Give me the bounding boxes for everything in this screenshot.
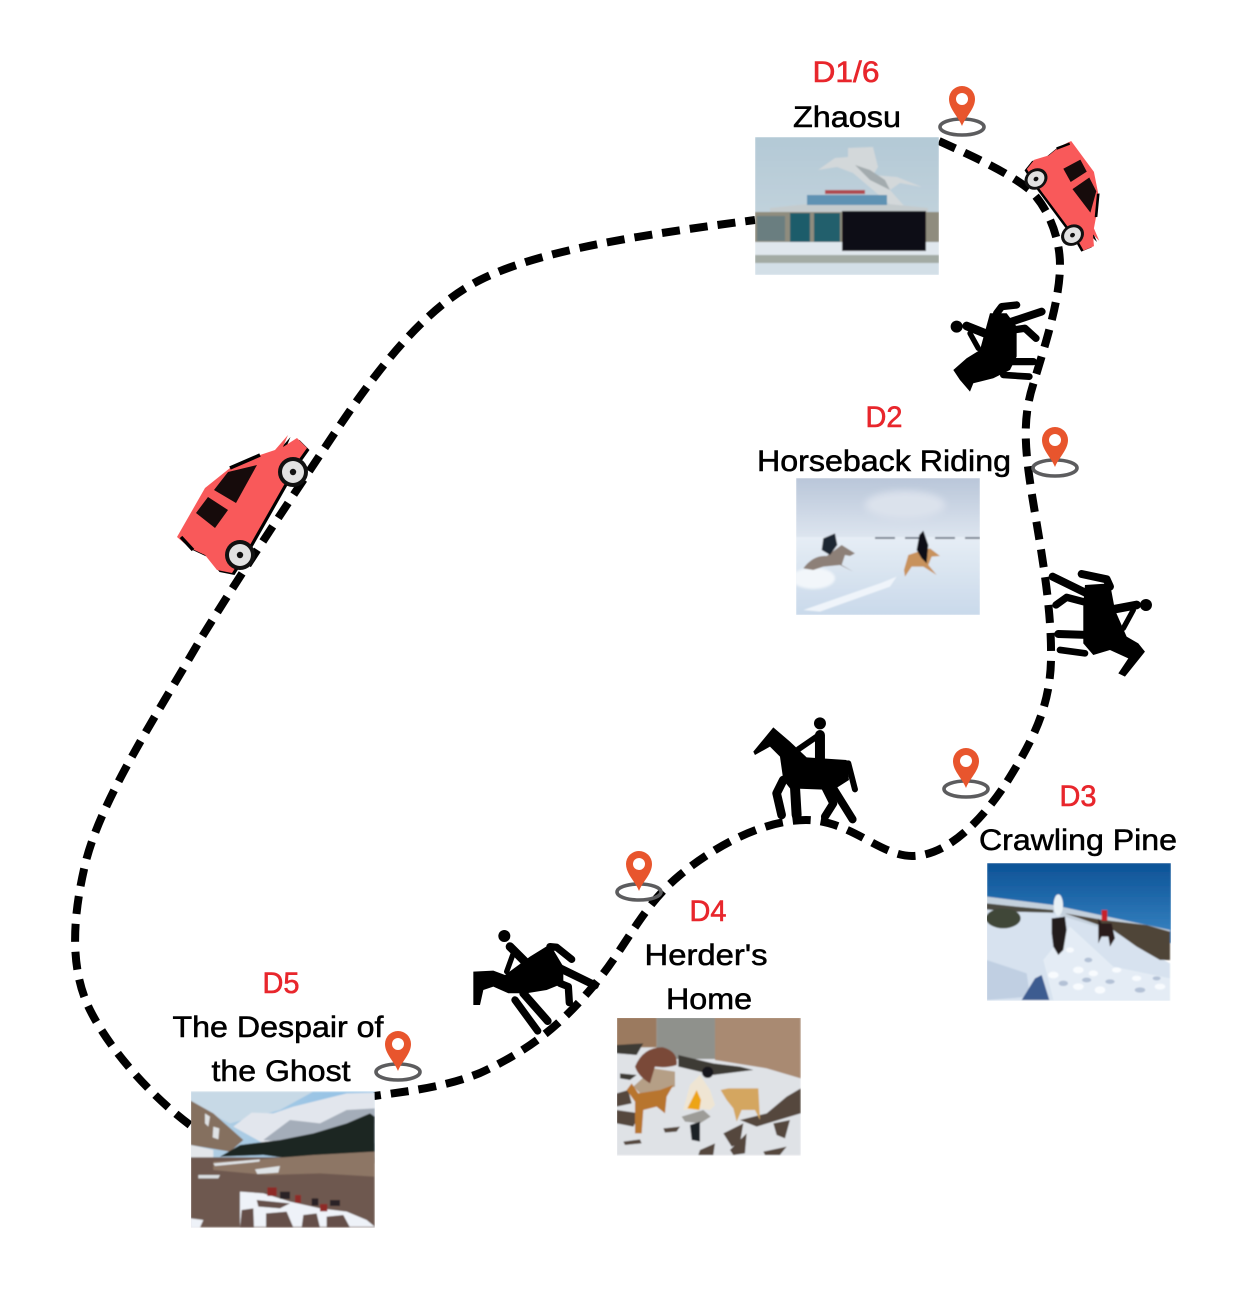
photo: two riders in snow xyxy=(796,478,980,615)
D5 day label: D5 xyxy=(262,967,300,1000)
D2 day label: D2 xyxy=(866,401,902,434)
The Despair of the Ghost place name: the Ghost xyxy=(212,1055,351,1088)
icon: red car, large, on return route xyxy=(177,435,310,575)
icon: location pin D1 xyxy=(940,86,984,135)
icon: horse and rider mirrored near D3 xyxy=(1053,574,1152,677)
icon: location pin D4 xyxy=(617,851,661,900)
D1/6 day label: D1/6 xyxy=(812,56,880,89)
route: dashed return line from D5 to Zhaosu xyxy=(75,220,755,1125)
icon: location pin D3 xyxy=(944,748,988,797)
D3 day label: D3 xyxy=(1060,780,1096,813)
D4 day label: D4 xyxy=(690,895,726,928)
photo: riders on snowy ridge under blue sky xyxy=(987,863,1171,1001)
icon: location pin D2 xyxy=(1033,427,1077,476)
icon: horse and rider turned left near D2 xyxy=(951,305,1042,392)
photo: Zhaosu station with horse statue xyxy=(755,137,939,275)
photo: herder crouching with dogs xyxy=(617,1018,801,1156)
icon: horse and rider upright on ridge xyxy=(753,717,855,819)
Herder's Home place name: Home xyxy=(666,983,752,1016)
Crawling Pine place name: Crawling Pine xyxy=(979,824,1177,857)
icon: horse and rider tilted near D4 xyxy=(473,930,595,1031)
The Despair of the Ghost place name: The Despair of xyxy=(172,1011,384,1044)
Herder's Home place name: Herder's xyxy=(644,939,768,972)
Horseback Riding place name: Horseback Riding xyxy=(757,445,1011,478)
icon: red car, small, near Zhaosu xyxy=(997,132,1140,255)
Zhaosu place name: Zhaosu xyxy=(793,101,901,134)
photo: snowy valley with riders xyxy=(191,1091,375,1228)
icon: location pin D5 xyxy=(376,1031,420,1080)
route: dashed line from Zhaosu through D2, D3, D4 to D5 xyxy=(374,141,1060,1096)
